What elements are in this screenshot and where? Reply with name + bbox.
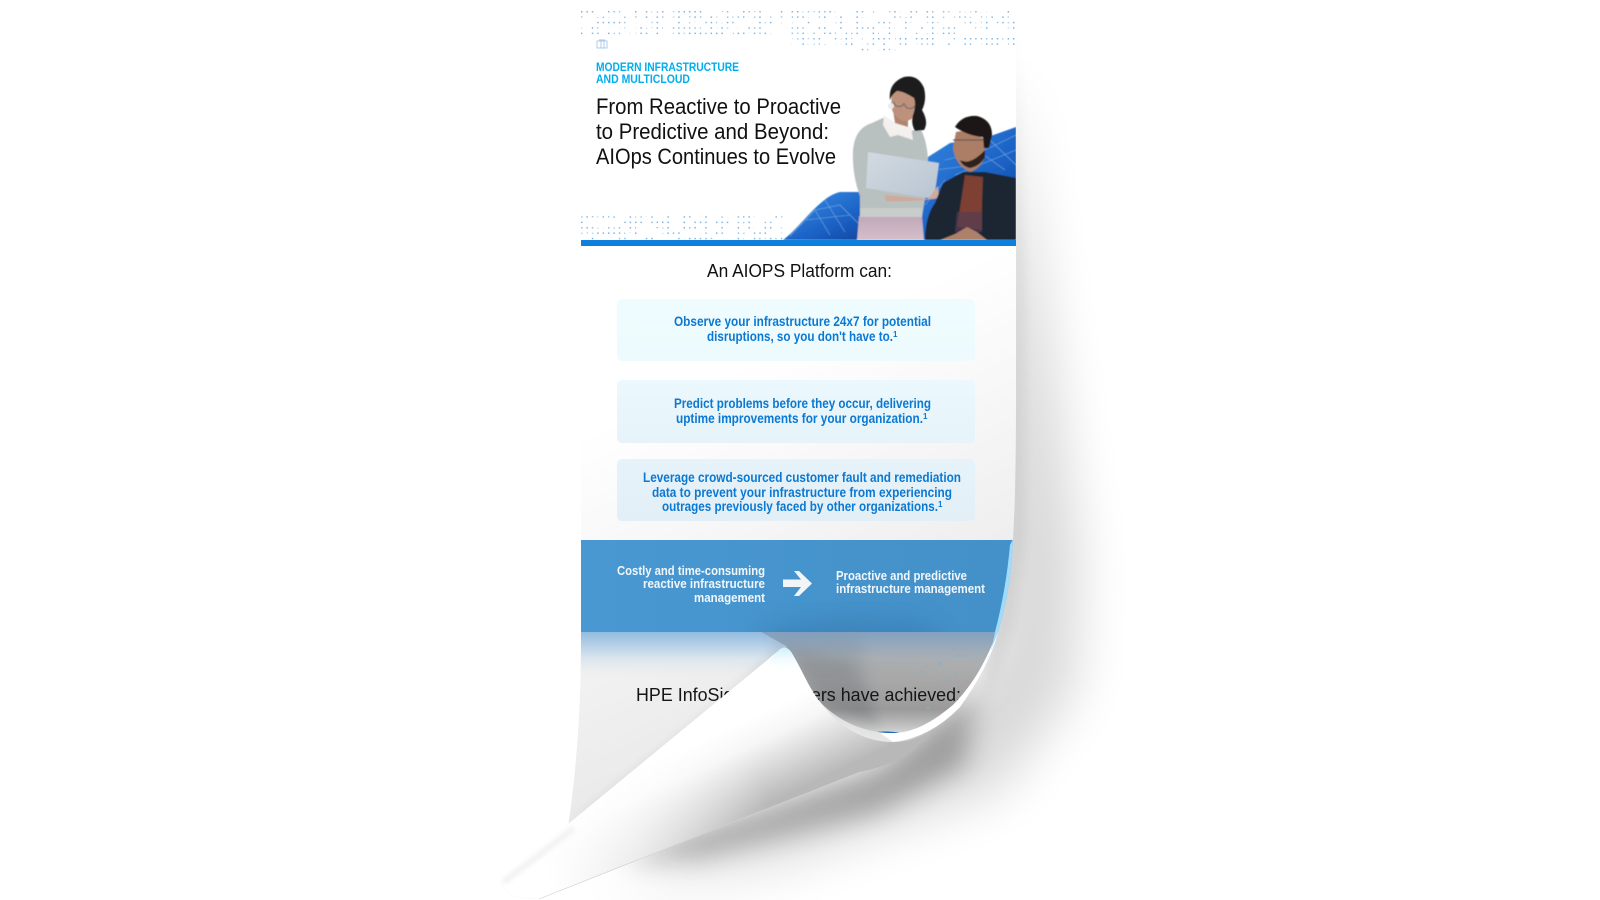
title: to Predictive and Beyond:	[596, 119, 829, 144]
reactive label: reactive infrastructure	[643, 577, 765, 591]
woman hands	[885, 186, 939, 201]
woman	[853, 76, 928, 240]
flap lower edge line	[539, 772, 860, 899]
card: observe: disruptions, so you don't have to.	[707, 329, 893, 344]
proactive label	[836, 569, 986, 596]
card: observe	[617, 299, 975, 361]
category label: AND MULTICLOUD	[596, 74, 690, 86]
icon: small logo mark	[597, 40, 607, 48]
curl rim	[880, 632, 998, 742]
page sheet	[560, 0, 1030, 840]
reactive label: management	[694, 591, 766, 605]
banner bottom bar	[581, 240, 1017, 246]
proactive label: infrastructure management	[836, 582, 986, 596]
flap highlight	[501, 648, 933, 899]
reactive label: Costly and time-consuming	[617, 564, 765, 578]
title: From Reactive to Proactive	[596, 94, 841, 119]
card: leverage: Leverage crowd-sourced customer fault and remediation	[643, 470, 961, 485]
card: leverage: 1	[938, 500, 943, 509]
heading: HPE InfoSight results: HPE InfoSight customers have achieved:	[636, 685, 961, 705]
card: predict	[617, 380, 975, 443]
fade below band	[581, 632, 998, 668]
infographic: curled page	[501, 11, 1098, 900]
man	[925, 116, 1016, 240]
card: predict: Predict problems before they occur, delivering	[674, 396, 931, 411]
reactive label	[617, 564, 766, 605]
title: AIOps Continues to Evolve	[596, 144, 836, 169]
card: predict: 1	[923, 412, 928, 421]
card: leverage: data to prevent your infrastructure from experiencing	[652, 485, 952, 500]
flap body	[501, 648, 933, 899]
banner photo: two people with blue mesh	[783, 76, 1016, 240]
band shading above curl	[769, 616, 931, 632]
laptop	[866, 152, 939, 199]
flap edge fold near tip	[505, 830, 572, 881]
curl shading on page	[774, 640, 866, 720]
proactive label: Proactive and predictive	[836, 569, 967, 583]
curled page flap	[501, 539, 1013, 899]
drop shadow	[600, 20, 1080, 898]
blue mesh landscape	[783, 127, 1016, 240]
card: observe: 1	[893, 330, 898, 339]
flap shadow on page	[568, 652, 790, 827]
flap tip tint	[770, 648, 806, 678]
card: leverage	[617, 459, 975, 521]
banner dot patterns	[581, 11, 1016, 240]
category label: MODERN INFRASTRUCTURE	[596, 62, 739, 74]
arrow	[783, 571, 812, 596]
band: reactive to proactive	[581, 540, 1017, 632]
card: leverage: outrages previously faced by other organizations.	[662, 499, 938, 514]
category label	[596, 62, 739, 83]
title	[596, 94, 841, 169]
card: observe: Observe your infrastructure 24x7 for potential	[674, 314, 931, 329]
curl hole shading	[760, 632, 1005, 737]
card: predict: uptime improvements for your organization.	[676, 411, 923, 426]
heading: AIOPS platform: An AIOPS Platform can:	[707, 261, 892, 281]
